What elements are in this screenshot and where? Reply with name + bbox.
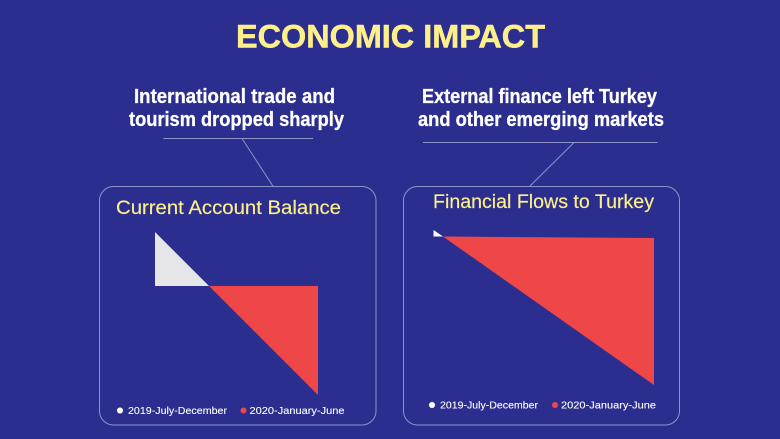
left heading: International trade and	[134, 86, 335, 108]
chart: red triangle 2020	[209, 286, 318, 395]
left heading	[129, 86, 345, 131]
title: ECONOMIC IMPACT	[236, 18, 545, 54]
connector: left heading to panel	[164, 138, 313, 187]
legend	[117, 405, 345, 417]
right heading	[418, 86, 664, 131]
legend: 2020-January-June	[561, 400, 656, 412]
panel: financial flows to turkey	[404, 186, 680, 425]
left heading: tourism dropped sharply	[129, 109, 345, 131]
chart: white triangle 2019	[434, 230, 443, 236]
right heading: and other emerging markets	[418, 109, 664, 131]
panel: current account balance	[100, 186, 376, 425]
legend: 2020-January-June	[250, 405, 345, 417]
legend: 2019-July-December	[128, 405, 228, 417]
connector: right heading to panel	[423, 142, 658, 186]
panel title: Financial Flows to Turkey	[433, 192, 655, 213]
right heading: External finance left Turkey	[422, 86, 658, 108]
panel title: Current Account Balance	[116, 198, 341, 219]
chart: red triangle 2020	[443, 236, 654, 385]
chart: white triangle 2019	[155, 232, 209, 286]
legend	[429, 400, 656, 412]
legend: 2019-July-December	[440, 400, 538, 412]
